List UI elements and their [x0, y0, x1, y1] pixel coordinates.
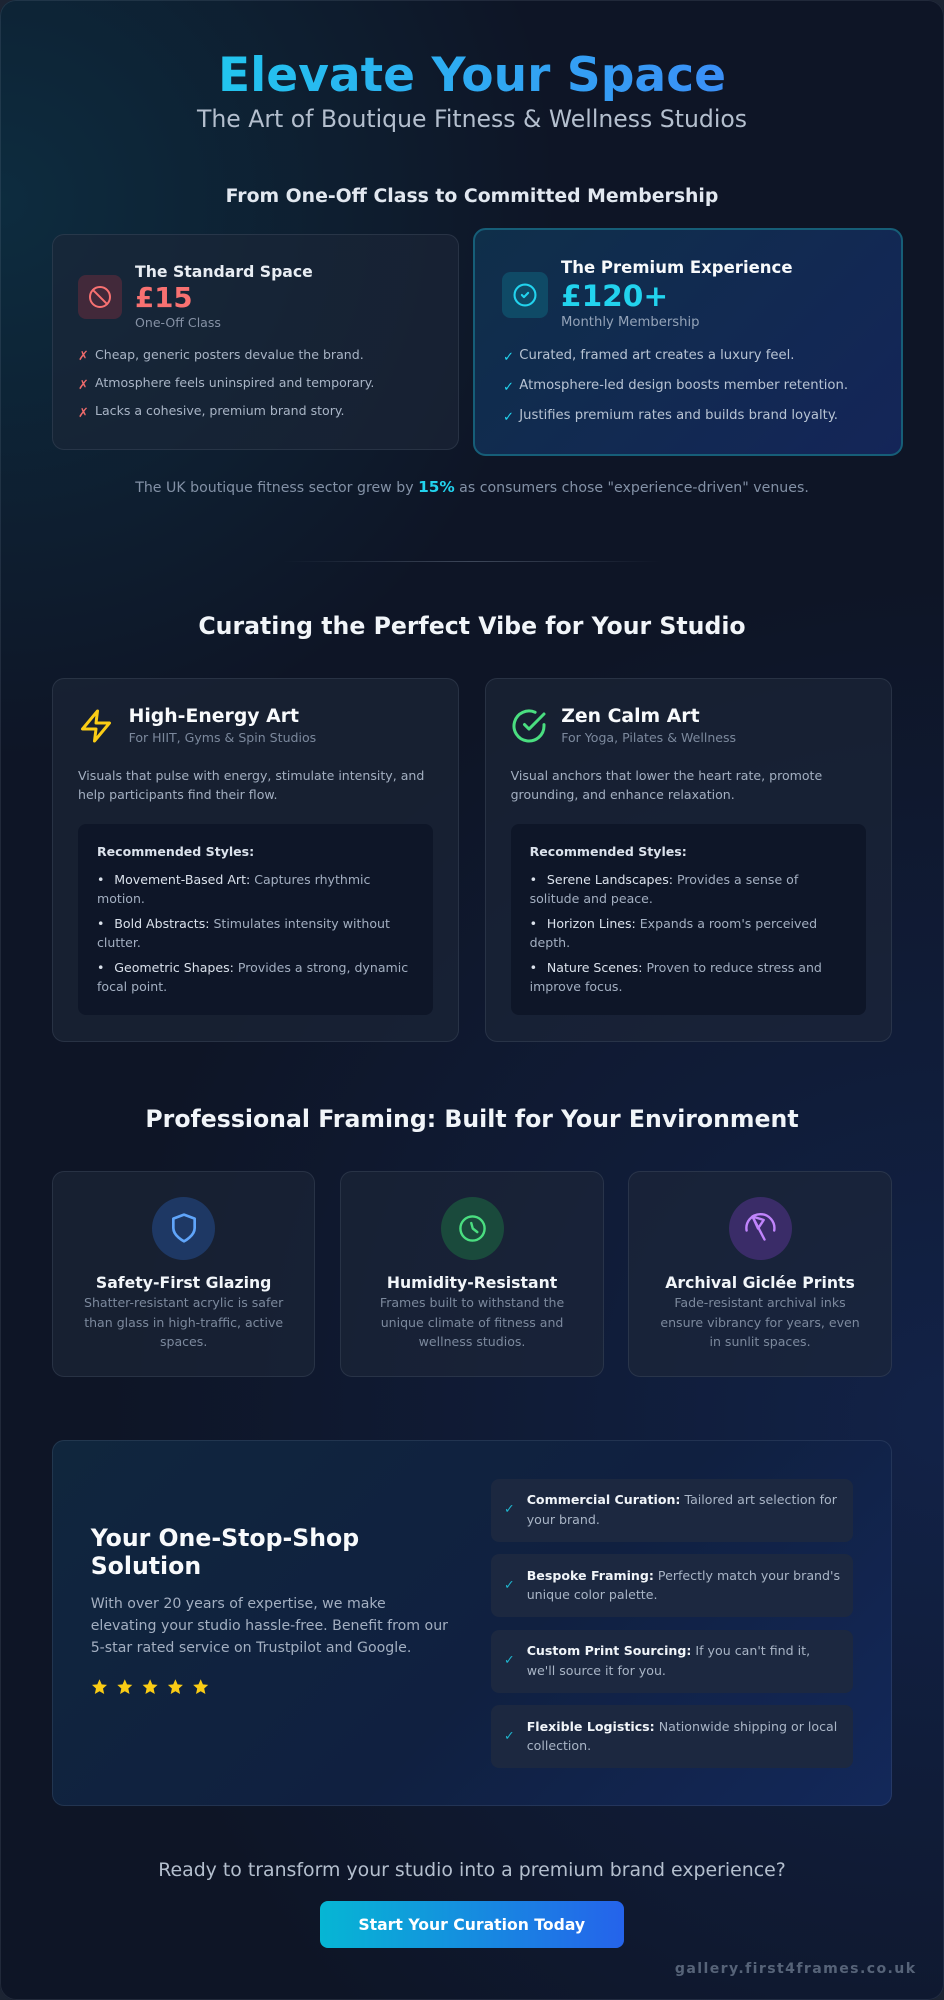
description: Visuals that pulse with energy, stimulate intensity, and — [78, 768, 424, 783]
service: commercial curation: ✓ — [504, 1502, 515, 1517]
card description: Frames built to withstand the — [380, 1295, 564, 1310]
description — [510, 768, 822, 802]
card title: The Premium Experience — [561, 258, 793, 277]
description — [78, 768, 424, 802]
recommended styles box: • — [530, 960, 537, 975]
watermark: gallery.first4frames.co.uk — [675, 1961, 916, 1977]
list: drawbacks: ✗ — [78, 406, 89, 421]
list: benefits: ✓ — [503, 410, 514, 425]
list: benefits: Atmosphere-led design boosts member retention. — [519, 378, 848, 393]
recommended styles box: • — [97, 872, 104, 887]
button: start your curation today: Start Your Curation Today — [358, 1915, 585, 1934]
card title: Safety-First Glazing — [96, 1273, 271, 1292]
card subtitle: For HIIT, Gyms & Spin Studios — [129, 730, 316, 745]
icon: ban — [78, 275, 122, 319]
service: custom print sourcing — [491, 1630, 852, 1692]
heading: from one-off class to committed membership: From One-Off Class to Committed Membership — [226, 186, 718, 207]
price label: Monthly Membership — [561, 315, 700, 330]
icon: check circle — [502, 272, 548, 318]
card description: than glass in high-traffic, active — [84, 1315, 283, 1330]
recommended styles box: Recommended Styles: — [530, 844, 687, 859]
heading — [90, 1524, 359, 1580]
star rating — [92, 1679, 208, 1694]
icon: clock — [441, 1197, 504, 1260]
service: bespoke framing: Bespoke Framing: Perfectly match your brand's — [527, 1568, 840, 1583]
panel: archival giclee prints — [628, 1171, 892, 1377]
description: Visual anchors that lower the heart rate, promote — [511, 768, 822, 783]
recommended styles box: • — [530, 872, 537, 887]
list: drawbacks: Lacks a cohesive, premium brand story. — [95, 403, 345, 418]
list: benefits: ✓ — [503, 350, 514, 365]
recommended styles box: • — [97, 960, 104, 975]
panel: zen calm art — [485, 678, 892, 1042]
price: £120+ — [561, 279, 668, 313]
call to action text: Ready to transform your studio into a premium brand experience? — [158, 1859, 786, 1881]
price label: One-Off Class — [135, 314, 221, 330]
paragraph: 5-star rated service on Trustpilot and Google. — [91, 1640, 411, 1656]
list: benefits: Justifies premium rates and builds brand loyalty. — [519, 408, 838, 423]
paragraph: With over 20 years of expertise, we make — [91, 1596, 386, 1612]
card title: Archival Giclée Prints — [665, 1273, 855, 1292]
list: benefits: ✓ — [503, 380, 514, 395]
card subtitle: For Yoga, Pilates & Wellness — [561, 730, 736, 745]
service: flexible logistics — [491, 1705, 852, 1768]
recommended styles box: Geometric Shapes: Provides a strong, dynamic focal point. — [97, 960, 408, 994]
list: drawbacks: ✗ — [78, 349, 89, 364]
heading: Solution — [91, 1552, 201, 1580]
heading: professional framing: Professional Framing: Built for Your Environment — [145, 1105, 799, 1133]
service: bespoke framing: unique color palette. — [527, 1587, 657, 1602]
card title: The Standard Space — [135, 262, 313, 280]
service: custom print sourcing: Custom Print Sourcing: If you can't find it, — [527, 1643, 810, 1658]
list: drawbacks — [78, 347, 374, 421]
recommended styles box: Nature Scenes: Proven to reduce stress and improve focus. — [530, 960, 822, 994]
price: £15 — [135, 281, 193, 314]
card description: spaces. — [160, 1334, 207, 1349]
card description: in sunlit spaces. — [709, 1334, 811, 1349]
panel: safety-first glazing — [52, 1171, 315, 1377]
service: commercial curation — [491, 1478, 852, 1542]
panel: the standard space — [52, 234, 459, 450]
list: benefits: Curated, framed art creates a luxury feel. — [519, 348, 794, 363]
recommended styles box — [511, 824, 866, 1015]
subtitle: The Art of Boutique Fitness & Wellness Studios — [197, 105, 747, 133]
service: flexible logistics: Flexible Logistics: Nationwide shipping or local — [527, 1719, 837, 1734]
paragraph — [91, 1596, 448, 1656]
panel: high-energy art — [52, 678, 459, 1042]
card description — [84, 1295, 284, 1349]
paragraph: elevating your studio hassle-free. Benefit from our — [91, 1618, 448, 1634]
recommended styles box: Serene Landscapes: Provides a sense of solitude and peace. — [530, 872, 798, 906]
recommended styles box: • — [97, 916, 104, 931]
list: drawbacks: ✗ — [78, 378, 89, 393]
recommended styles box: Recommended Styles: — [97, 844, 254, 859]
heading: curating the perfect vibe: Curating the Perfect Vibe for Your Studio — [198, 612, 746, 640]
recommended styles box — [78, 824, 433, 1015]
card description: unique climate of fitness and — [381, 1315, 563, 1330]
icon: print nib — [729, 1197, 792, 1260]
card description: wellness studios. — [419, 1334, 525, 1349]
description: help participants find their flow. — [78, 787, 277, 802]
recommended styles box: Horizon Lines: Expands a room's perceived depth. — [530, 916, 817, 950]
recommended styles box: Movement-Based Art: Captures rhythmic motion. — [97, 872, 370, 906]
card title: Zen Calm Art — [561, 706, 700, 727]
card description: ensure vibrancy for years, even — [660, 1315, 860, 1330]
icon: lightning bolt — [80, 710, 112, 742]
service: flexible logistics: collection. — [527, 1738, 591, 1753]
description: grounding, and enhance relaxation. — [511, 787, 735, 802]
panel: the premium experience — [473, 228, 903, 456]
card title: Humidity-Resistant — [387, 1273, 557, 1292]
icon: check circle — [512, 709, 546, 742]
card description — [380, 1295, 564, 1349]
list: drawbacks: Atmosphere feels uninspired and temporary. — [95, 375, 374, 390]
card description: Shatter-resistant acrylic is safer — [84, 1295, 283, 1310]
recommended styles box: • — [530, 916, 537, 931]
service: commercial curation: your brand. — [527, 1512, 600, 1526]
recommended styles box: Bold Abstracts: Stimulates intensity without clutter. — [97, 916, 390, 950]
panel: humidity-resistant — [340, 1171, 604, 1377]
service: bespoke framing — [491, 1554, 852, 1617]
button: start your curation today — [320, 1901, 624, 1948]
list: drawbacks: Cheap, generic posters devalue the brand. — [95, 347, 364, 362]
title: Elevate Your Space — [218, 48, 726, 103]
service: bespoke framing: ✓ — [504, 1578, 515, 1593]
list: benefits — [503, 348, 848, 425]
panel: one-stop-shop solution — [52, 1440, 892, 1806]
card title: High-Energy Art — [129, 706, 299, 727]
icon: shield — [152, 1197, 215, 1260]
card description: Fade-resistant archival inks — [674, 1295, 846, 1310]
stat line: The UK boutique fitness sector grew by 15% as consumers chose "experience-driven" venues. — [135, 478, 809, 496]
service: flexible logistics: ✓ — [504, 1728, 515, 1744]
service: commercial curation: Commercial Curation: Tailored art selection for — [527, 1492, 837, 1507]
card description — [660, 1295, 860, 1349]
service: custom print sourcing: we'll source it for you. — [527, 1662, 666, 1678]
service: custom print sourcing: ✓ — [504, 1653, 515, 1668]
heading: Your One-Stop-Shop — [91, 1524, 359, 1552]
